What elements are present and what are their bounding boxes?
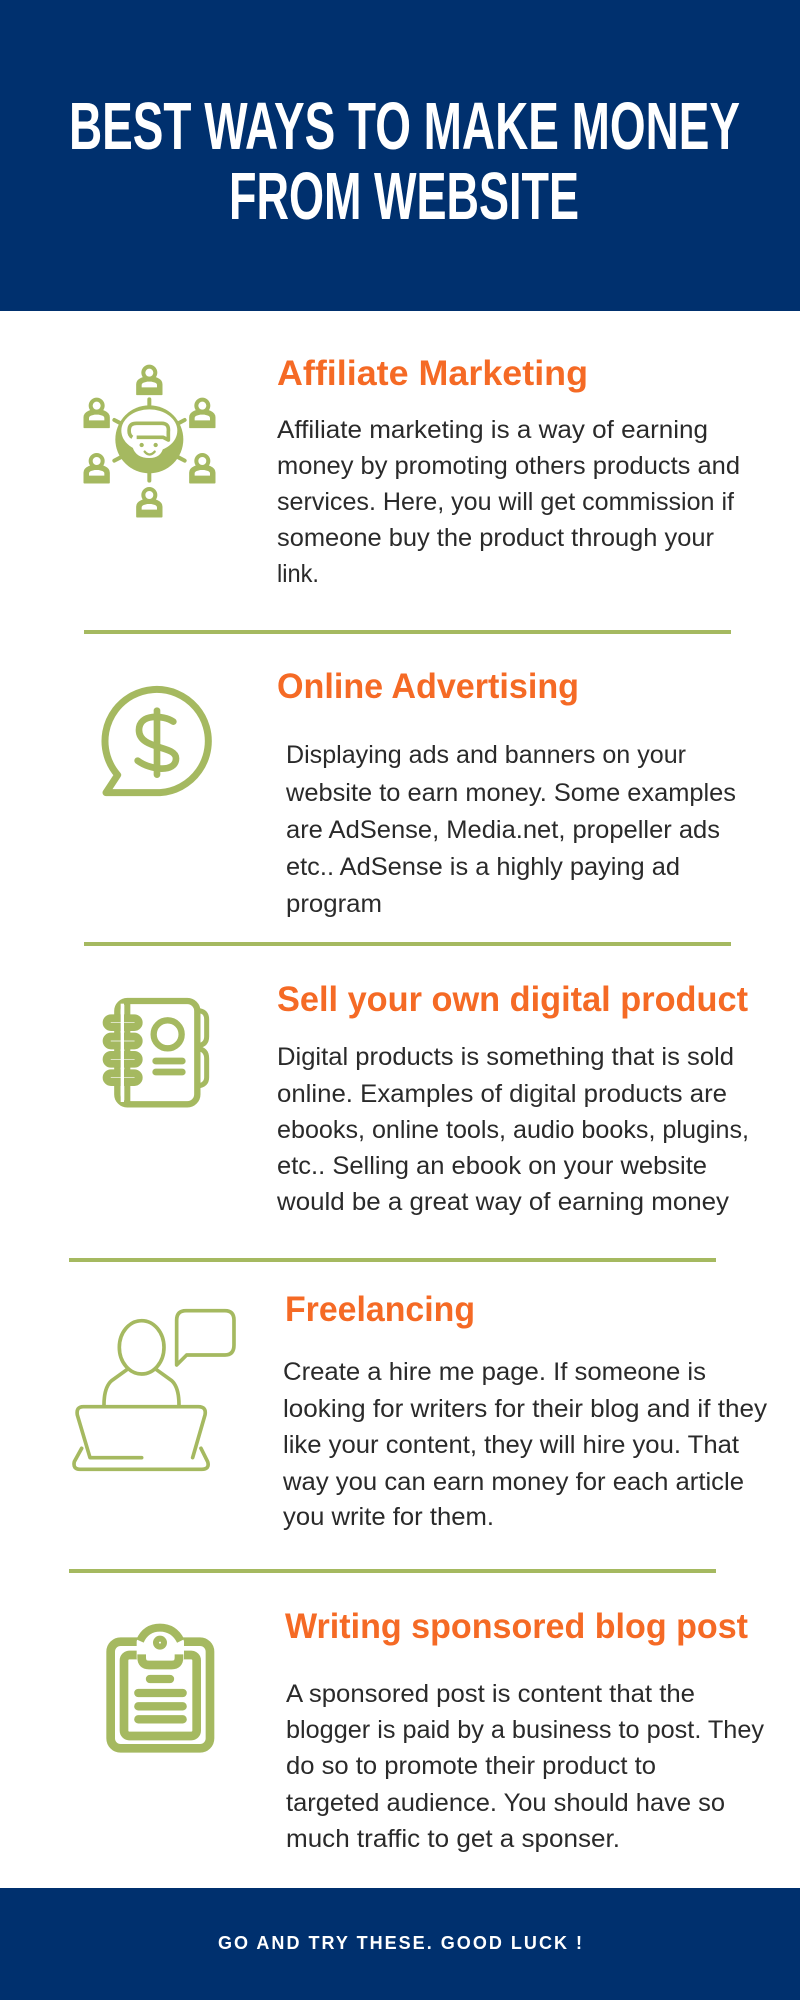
body text: A sponsored post is content that the [286, 1680, 695, 1708]
body text: etc.. Selling an ebook on your website [277, 1152, 707, 1180]
body text: blogger is paid by a business to post. They [286, 1716, 765, 1744]
body text: services. Here, you will get commission if [277, 488, 734, 516]
body text: would be a great way of earning money [276, 1188, 730, 1216]
body text: Affiliate marketing is a way of earning [277, 416, 708, 444]
body text: online. Examples of digital products are [277, 1080, 727, 1108]
panel: affiliate marketing [84, 354, 740, 588]
body text [286, 1680, 765, 1853]
body text [282, 1358, 768, 1531]
body text [277, 416, 740, 588]
body text: like your content, they will hire you. That [283, 1431, 739, 1459]
footer band [0, 1888, 800, 2000]
body text: etc.. AdSense is a highly paying ad [286, 853, 680, 881]
panel: sell your own digital product [107, 980, 749, 1216]
body text: program [286, 890, 382, 918]
body text: Create a hire me page. If someone is [283, 1358, 706, 1386]
body text: Displaying ads and banners on your [286, 741, 686, 769]
body text: targeted audience. You should have so [286, 1789, 725, 1817]
panel: freelancing [74, 1290, 768, 1531]
body text: ebooks, online tools, audio books, plugins, [277, 1116, 749, 1144]
icon: dollar speech bubble [105, 689, 208, 793]
body text: are AdSense, Media.net, propeller ads [286, 816, 720, 844]
body text: someone buy the product through your [277, 524, 714, 552]
heading: Freelancing [285, 1290, 475, 1329]
icon: person at laptop [74, 1311, 234, 1469]
header band [0, 0, 800, 311]
body text [285, 741, 736, 918]
body text: link. [277, 560, 319, 588]
body text: Digital products is something that is sold [277, 1043, 734, 1071]
heading: Affiliate Marketing [277, 354, 588, 393]
footer text: GO AND TRY THESE. GOOD LUCK ! [218, 1933, 582, 1953]
panel: online advertising [105, 667, 736, 918]
icon: notebook [107, 1001, 207, 1104]
body text: do so to promote their product to [286, 1752, 656, 1780]
body text: website to earn money. Some examples [285, 779, 736, 807]
body text: looking for writers for their blog and if they [283, 1395, 768, 1423]
heading: Sell your own digital product [277, 980, 748, 1019]
body text: money by promoting others products and [277, 452, 740, 480]
heading: Online Advertising [277, 667, 579, 706]
title: FROM WEBSITE [229, 159, 579, 234]
panel: writing sponsored blog post [111, 1607, 765, 1853]
icon: clipboard [111, 1628, 210, 1748]
title [69, 89, 740, 234]
heading: Writing sponsored blog post [285, 1607, 748, 1646]
icon: network of people [84, 367, 215, 517]
body text [276, 1043, 749, 1216]
body text: much traffic to get a sponser. [286, 1825, 620, 1853]
body text: way you can earn money for each article [282, 1468, 744, 1496]
body text: you write for them. [283, 1503, 494, 1531]
